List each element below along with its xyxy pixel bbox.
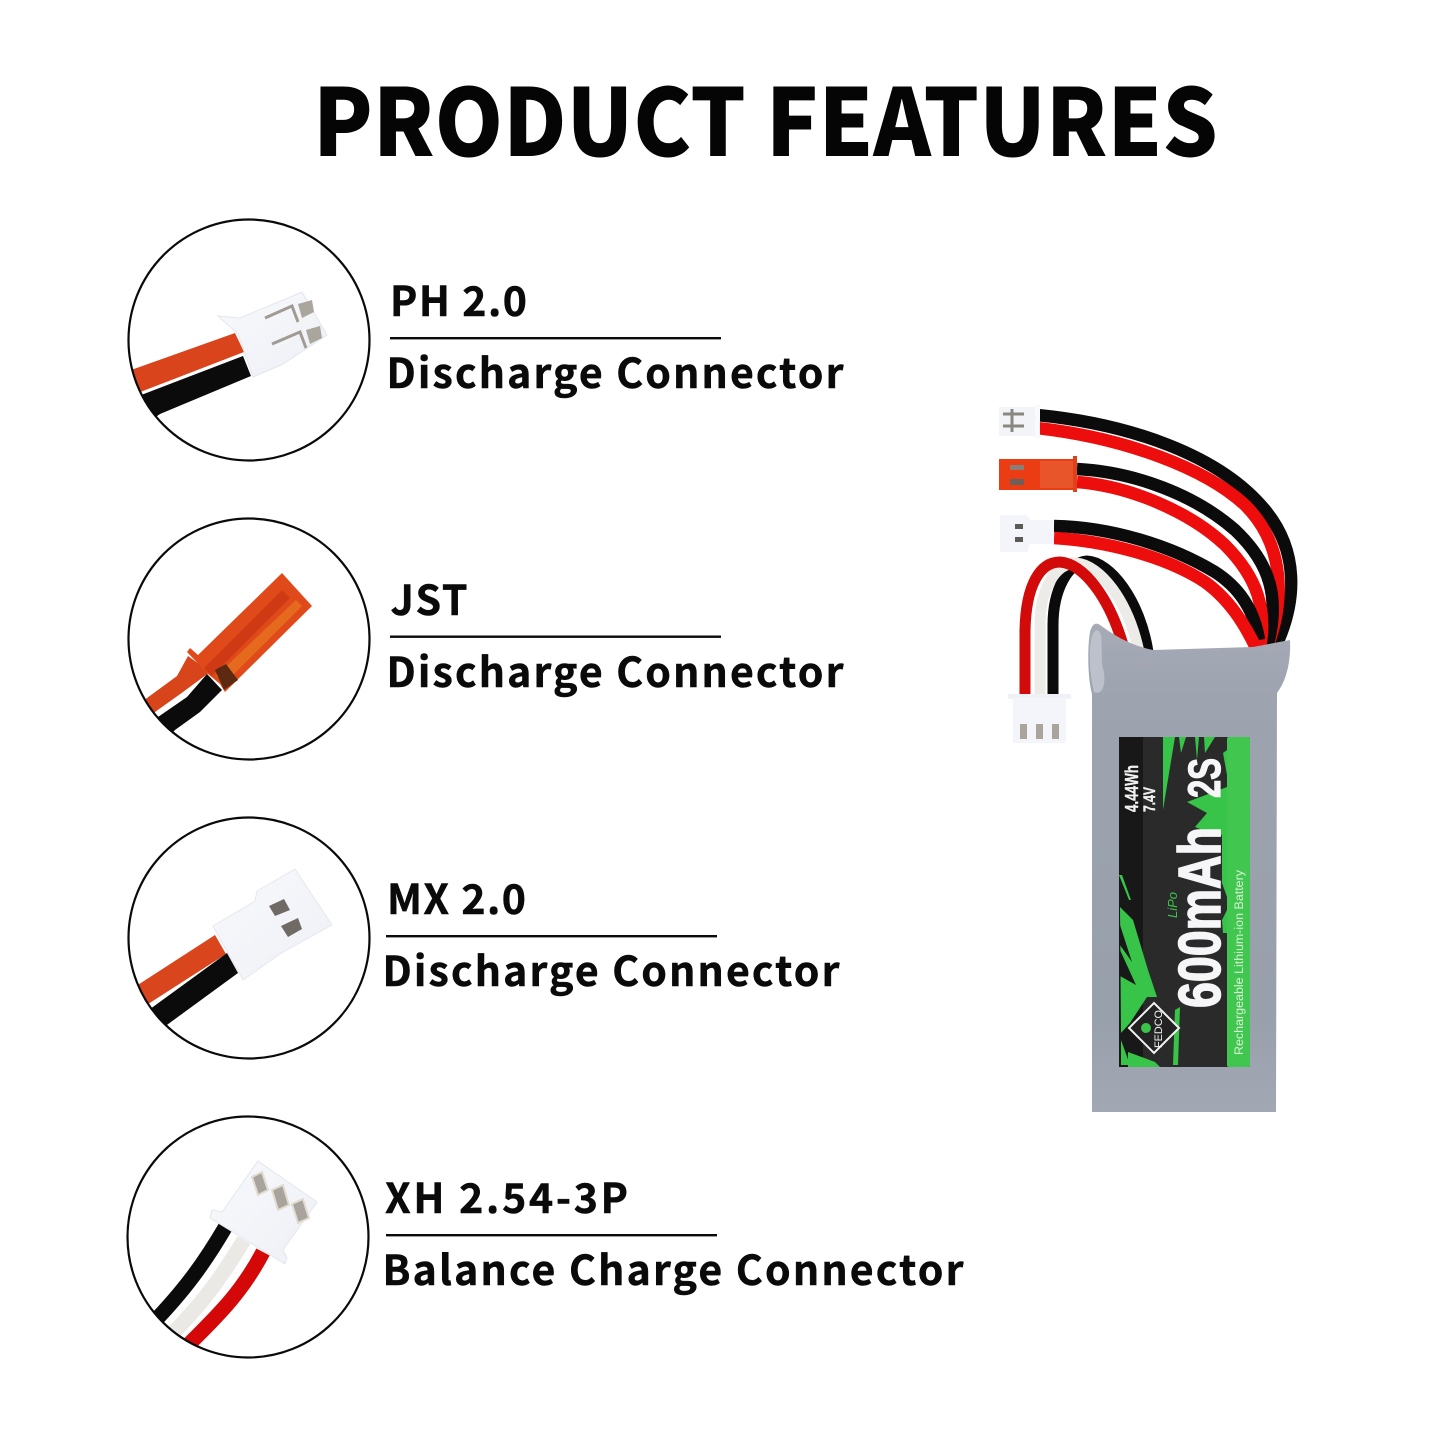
description: discharge connector: Discharge Connector bbox=[386, 340, 844, 400]
wires: balance lead bbox=[1025, 561, 1148, 696]
label: voltage text: 7.4V bbox=[1140, 787, 1159, 812]
battery label bbox=[1119, 737, 1250, 1067]
description: discharge connector: Discharge Connector bbox=[382, 938, 840, 998]
label: energy text: 4.44Wh bbox=[1122, 765, 1142, 812]
label: PH 2.0: PH 2.0 bbox=[390, 268, 527, 328]
panel: JST connector bbox=[128, 518, 844, 760]
label: green streak graphics bbox=[1119, 737, 1227, 1067]
label: JST: JST bbox=[390, 567, 468, 627]
icon: MX 2.0 connector photo bbox=[128, 818, 370, 1058]
label: MX 2.0: MX 2.0 bbox=[387, 866, 526, 926]
panel: battery product image bbox=[999, 405, 1291, 1112]
panel: PH 2.0 connector bbox=[120, 220, 844, 460]
description: balance charge connector: Balance Charge Connector bbox=[382, 1237, 964, 1297]
label: capacity text: 600mAh bbox=[1167, 827, 1233, 1008]
icon: PH 2.0 connector photo bbox=[120, 220, 370, 460]
label: FEDCO logo bbox=[1129, 1003, 1179, 1053]
panel: XH 2.54-3P connector bbox=[128, 1116, 964, 1358]
panel: MX 2.0 connector bbox=[128, 818, 840, 1058]
connector: MX 2.0 white plug bbox=[1000, 515, 1054, 552]
label: 2S text: 2S bbox=[1179, 758, 1230, 798]
wires: discharge leads bbox=[1037, 415, 1291, 648]
battery pouch bbox=[1088, 624, 1290, 1112]
title: PRODUCT FEATURES bbox=[313, 48, 1218, 183]
icon: XH 2.54-3P connector photo bbox=[128, 1116, 368, 1358]
connector: XH balance plug bbox=[1008, 694, 1071, 743]
description: discharge connector: Discharge Connector bbox=[386, 639, 844, 699]
label: LiPo text: LiPo bbox=[1165, 892, 1180, 918]
label: battery type text: Rechargeable Lithium-ion Battery bbox=[1234, 870, 1246, 1055]
label: FEDCO logo: FEDCO bbox=[1153, 1010, 1165, 1048]
label: dark slashes over streaks bbox=[1120, 925, 1136, 985]
label: XH 2.54-3P: XH 2.54-3P bbox=[385, 1165, 628, 1225]
connector: JST red plug bbox=[999, 456, 1077, 492]
connector: PH 2.0 white plug bbox=[999, 405, 1040, 438]
icon: JST connector photo bbox=[128, 518, 370, 760]
